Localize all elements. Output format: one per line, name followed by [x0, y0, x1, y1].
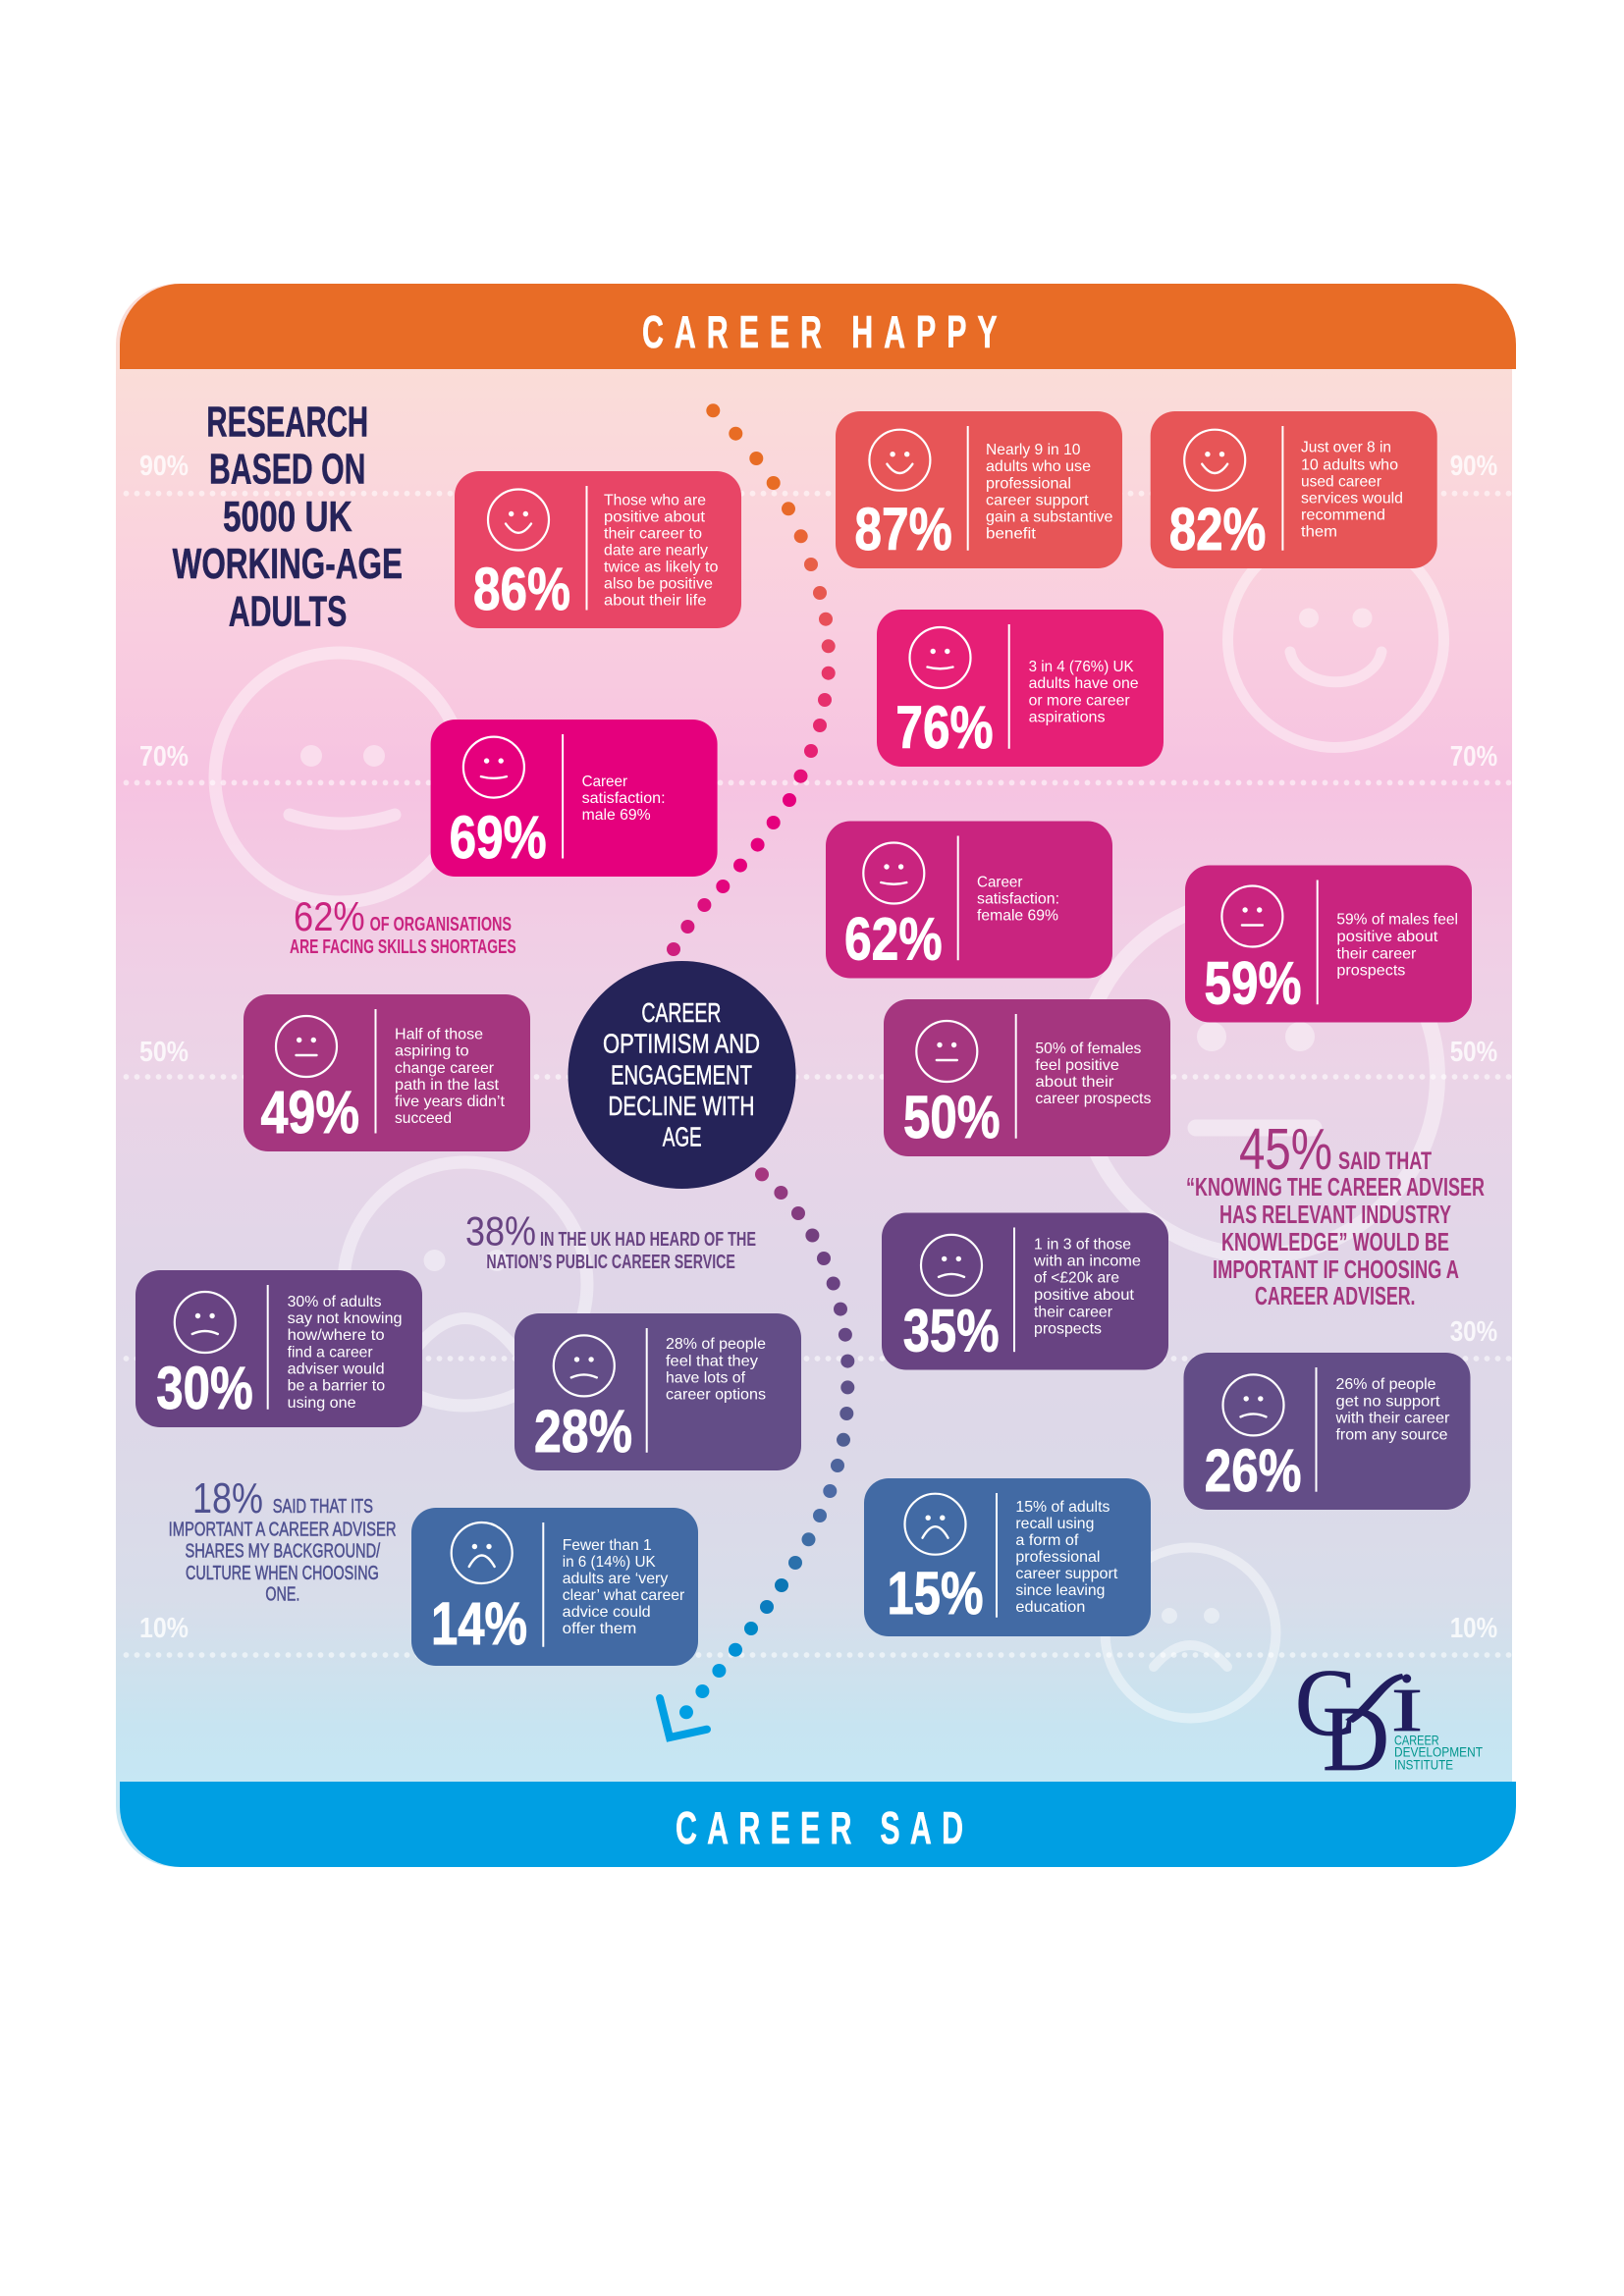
percentage: 26%	[1205, 1437, 1301, 1504]
card: 87%	[836, 411, 1122, 568]
callout: 18% shared background: SHARES MY BACKGROUND/	[185, 1541, 381, 1563]
callout: 38% public career service: NATION’S PUBLIC CAREER SERVICE	[486, 1252, 735, 1273]
heading: research based on: BASED ON	[209, 446, 365, 494]
description: satisfaction:	[977, 891, 1059, 907]
description: services would	[1301, 491, 1403, 507]
dotted trend line: lower	[679, 1167, 854, 1719]
description: find a career	[288, 1345, 373, 1361]
heading: research based on: ADULTS	[229, 588, 347, 636]
description: adults who use	[986, 458, 1091, 475]
description: professional	[986, 475, 1071, 493]
callout: 38% public career service: 38%	[465, 1207, 536, 1254]
description: a form of	[1015, 1532, 1079, 1549]
card: 59%	[1185, 866, 1472, 1023]
description: satisfaction:	[582, 790, 666, 807]
description: how/where to	[288, 1327, 385, 1344]
description: also be positive	[604, 576, 713, 593]
description: offer them	[563, 1621, 636, 1637]
callout: 18% shared background: 18%	[192, 1474, 263, 1522]
description: adviser would	[288, 1361, 385, 1378]
card: 35%	[882, 1213, 1168, 1370]
description: recall using	[1015, 1516, 1094, 1532]
header band: career happy	[120, 284, 1516, 369]
description: them	[1301, 524, 1337, 541]
icon: slight frown	[175, 1292, 236, 1353]
footer band: career sad: CAREER SAD	[676, 1804, 963, 1854]
description: education	[1015, 1599, 1085, 1616]
description: 1 in 3 of those	[1034, 1237, 1131, 1253]
card: 14%	[411, 1508, 698, 1666]
description: advice could	[563, 1604, 651, 1621]
description: positive about	[1034, 1287, 1135, 1304]
description: 50% of females	[1035, 1041, 1141, 1057]
description: Just over 8 in	[1301, 440, 1391, 456]
icon: frown	[905, 1494, 966, 1555]
description: 26% of people	[1335, 1376, 1436, 1393]
description: since leaving	[1015, 1582, 1105, 1599]
heading: research based on	[173, 398, 403, 636]
description	[986, 442, 1113, 543]
callout: 45% industry knowledge: SAID THAT	[1338, 1148, 1432, 1175]
description: adults have one	[1029, 675, 1139, 692]
icon: big smile	[869, 430, 930, 491]
scale labels: 90%	[1450, 451, 1497, 482]
callout: 18% shared background: IMPORTANT A CAREER ADVISER	[169, 1519, 397, 1540]
percentage: 76%	[895, 694, 994, 761]
description	[1301, 440, 1403, 541]
icon: slight smile	[909, 627, 970, 688]
background face: lower right sad	[1106, 1547, 1276, 1718]
icon: slight smile	[863, 842, 924, 903]
icon: neutral face	[276, 1016, 337, 1077]
description: career support	[986, 493, 1089, 508]
description	[1334, 1376, 1450, 1443]
heading: research based on: RESEARCH	[206, 398, 368, 446]
description	[1015, 1499, 1118, 1616]
description: 30% of adults	[288, 1294, 382, 1310]
scale labels: 50%	[139, 1037, 189, 1068]
description	[1029, 659, 1139, 726]
icon: frown	[452, 1522, 513, 1583]
description: career support	[1015, 1566, 1118, 1582]
callout: 18% shared background: SAID THAT ITS	[273, 1496, 373, 1518]
arrow head	[660, 1698, 707, 1737]
description: using one	[288, 1395, 356, 1412]
callout: 62% organisations: 62%	[294, 893, 365, 939]
callout: 62% organisations: OF ORGANISATIONS	[370, 914, 512, 935]
description: their career to	[604, 525, 702, 542]
percentage: 86%	[473, 556, 570, 622]
description	[604, 492, 719, 610]
description: 3 in 4 (76%) UK	[1029, 659, 1134, 675]
percentage: 28%	[534, 1398, 632, 1465]
callout: 18% shared background: CULTURE WHEN CHOOSING	[186, 1563, 379, 1584]
description: feel positive	[1035, 1057, 1119, 1074]
description: from any source	[1335, 1427, 1448, 1443]
description: adults are ‘very	[563, 1571, 668, 1587]
logo: CDI: D	[1323, 1688, 1389, 1790]
description: 59% of males feel	[1336, 911, 1458, 929]
background face: left neutral smile	[215, 653, 464, 902]
percentage: 35%	[903, 1298, 1000, 1364]
icon: slight frown	[1223, 1374, 1284, 1435]
description: with their career	[1334, 1410, 1450, 1427]
description: aspiring to	[395, 1042, 469, 1060]
description: have lots of	[666, 1370, 746, 1386]
scale labels: 10%	[139, 1613, 189, 1644]
description: be a barrier to	[288, 1378, 385, 1394]
description: Nearly 9 in 10	[986, 442, 1081, 458]
logo: CDI: C	[1295, 1650, 1356, 1756]
description: 28% of people	[666, 1336, 766, 1353]
description	[288, 1294, 403, 1412]
description	[563, 1537, 685, 1637]
description: five years didn’t	[395, 1094, 506, 1110]
dotted trend line: upper	[667, 403, 836, 956]
icon: slight frown	[921, 1235, 982, 1296]
description: positive about	[1336, 929, 1438, 945]
background face: top right smile	[1227, 532, 1443, 748]
header band: career happy: CAREER HAPPY	[642, 308, 998, 358]
logo: CDI: I	[1391, 1678, 1423, 1744]
description: career prospects	[1035, 1091, 1151, 1107]
percentage: 82%	[1169, 496, 1266, 562]
callout: 45% industry knowledge: 45%	[1239, 1117, 1332, 1182]
description: Those who are	[604, 492, 706, 508]
card: 15%	[864, 1478, 1151, 1636]
description: Career	[582, 774, 628, 790]
description: Half of those	[395, 1027, 483, 1042]
percentage: 62%	[844, 905, 943, 972]
callout: 62% organisations: ARE FACING SKILLS SHORTAGES	[290, 936, 516, 958]
icon: neutral face	[916, 1021, 977, 1082]
description: or more career	[1029, 693, 1130, 709]
description: professional	[1015, 1549, 1100, 1566]
central circle	[568, 961, 795, 1189]
description: about their life	[604, 593, 707, 610]
description: recommend	[1301, 507, 1385, 523]
description: male 69%	[582, 807, 651, 824]
percentage: 87%	[854, 496, 952, 562]
callout: 62% organisations	[290, 893, 516, 958]
description: get no support	[1335, 1394, 1440, 1410]
background face: lower left frown	[344, 1162, 587, 1406]
icon: big smile	[488, 489, 549, 550]
description: in 6 (14%) UK	[563, 1554, 656, 1571]
description: with an income	[1033, 1253, 1141, 1270]
description: aspirations	[1029, 709, 1106, 726]
description: say not knowing	[288, 1310, 403, 1327]
card: 69%	[431, 720, 718, 877]
description: prospects	[1034, 1321, 1102, 1337]
percentage: 49%	[261, 1079, 359, 1146]
callout: 45% industry knowledge: CAREER ADVISER.	[1255, 1281, 1416, 1310]
icon: slight smile	[463, 737, 524, 798]
description: 15% of adults	[1015, 1499, 1110, 1516]
description: twice as likely to	[604, 560, 719, 576]
card: 62%	[826, 821, 1112, 978]
card: 76%	[877, 610, 1164, 767]
description: career options	[666, 1386, 766, 1404]
description: their career	[1336, 946, 1417, 962]
card: 30%	[135, 1270, 422, 1427]
heading: research based on: 5000 UK	[223, 493, 352, 541]
percentage: 14%	[431, 1590, 527, 1657]
scale labels: 10%	[1450, 1613, 1497, 1644]
description	[977, 874, 1059, 925]
scale labels: 70%	[1450, 741, 1497, 773]
description: of <£20k are	[1034, 1270, 1119, 1286]
central circle: ENGAGEMENT	[611, 1059, 752, 1090]
central circle: DECLINE WITH	[608, 1091, 754, 1121]
callout: 45% industry knowledge: “KNOWING THE CAREER ADVISER	[1186, 1172, 1485, 1201]
callout: 18% shared background: ONE.	[265, 1584, 299, 1606]
panel: gradient background	[116, 284, 1512, 1867]
scale labels: 30%	[1450, 1316, 1497, 1348]
card: 50%	[884, 999, 1170, 1156]
logo: CDI	[1295, 1650, 1483, 1790]
percentage: 15%	[888, 1560, 984, 1627]
card: 82%	[1151, 411, 1437, 568]
footer band: career sad	[120, 1782, 1516, 1867]
description: 10 adults who	[1301, 456, 1398, 473]
card: 49%	[244, 994, 530, 1151]
description	[666, 1336, 766, 1404]
description: used career	[1301, 473, 1382, 490]
description: prospects	[1336, 962, 1405, 980]
description	[582, 774, 666, 824]
description: clear’ what career	[563, 1587, 685, 1604]
scale labels: 90%	[139, 451, 189, 482]
icon: big smile	[1184, 430, 1245, 491]
description	[1336, 911, 1458, 980]
percentage: 50%	[903, 1084, 1001, 1150]
description	[1035, 1041, 1151, 1107]
callout: 38% public career service	[465, 1207, 756, 1273]
description: positive about	[604, 508, 706, 525]
card: 28%	[514, 1313, 801, 1470]
callout: 38% public career service: IN THE UK HAD HEARD OF THE	[540, 1229, 756, 1251]
scale labels	[139, 451, 1497, 1644]
background face: right neutral	[1080, 898, 1437, 1255]
description	[395, 1027, 506, 1127]
percentage: 59%	[1204, 950, 1302, 1017]
scale labels: 50%	[1450, 1037, 1497, 1068]
description: gain a substantive	[986, 508, 1113, 526]
callout: 45% industry knowledge	[1186, 1117, 1485, 1310]
central circle: OPTIMISM AND	[603, 1028, 760, 1058]
card: 86%	[455, 471, 741, 628]
central circle: CAREER	[641, 997, 721, 1028]
description: date are nearly	[604, 542, 708, 560]
icon: slight frown	[554, 1335, 615, 1396]
percentage: 69%	[450, 804, 547, 871]
description	[1033, 1237, 1141, 1337]
logo: CDI: DEVELOPMENT	[1394, 1744, 1483, 1760]
callout: 45% industry knowledge: IMPORTANT IF CHOOSING A	[1213, 1255, 1459, 1284]
description: Fewer than 1	[563, 1537, 652, 1554]
heading: research based on: WORKING-AGE	[173, 540, 403, 588]
description: feel that they	[666, 1353, 758, 1370]
icon: neutral face	[1221, 885, 1282, 946]
percentage: 30%	[156, 1355, 253, 1421]
central circle: AGE	[663, 1122, 702, 1152]
callout: 45% industry knowledge: HAS RELEVANT INDUSTRY	[1219, 1200, 1451, 1229]
logo: CDI: CAREER	[1394, 1733, 1439, 1748]
scale labels: 70%	[139, 741, 189, 773]
description: succeed	[395, 1110, 452, 1127]
description: their career	[1034, 1304, 1113, 1321]
description: female 69%	[977, 907, 1058, 925]
callout: 45% industry knowledge: KNOWLEDGE” WOULD BE	[1221, 1227, 1449, 1256]
callout: 18% shared background	[169, 1474, 397, 1606]
description: about their	[1035, 1074, 1114, 1091]
description: path in the last	[395, 1077, 500, 1094]
card: 26%	[1184, 1353, 1471, 1510]
description: Career	[977, 874, 1023, 891]
description: benefit	[986, 526, 1037, 543]
description: change career	[395, 1060, 495, 1077]
logo: CDI: INSTITUTE	[1394, 1756, 1453, 1772]
